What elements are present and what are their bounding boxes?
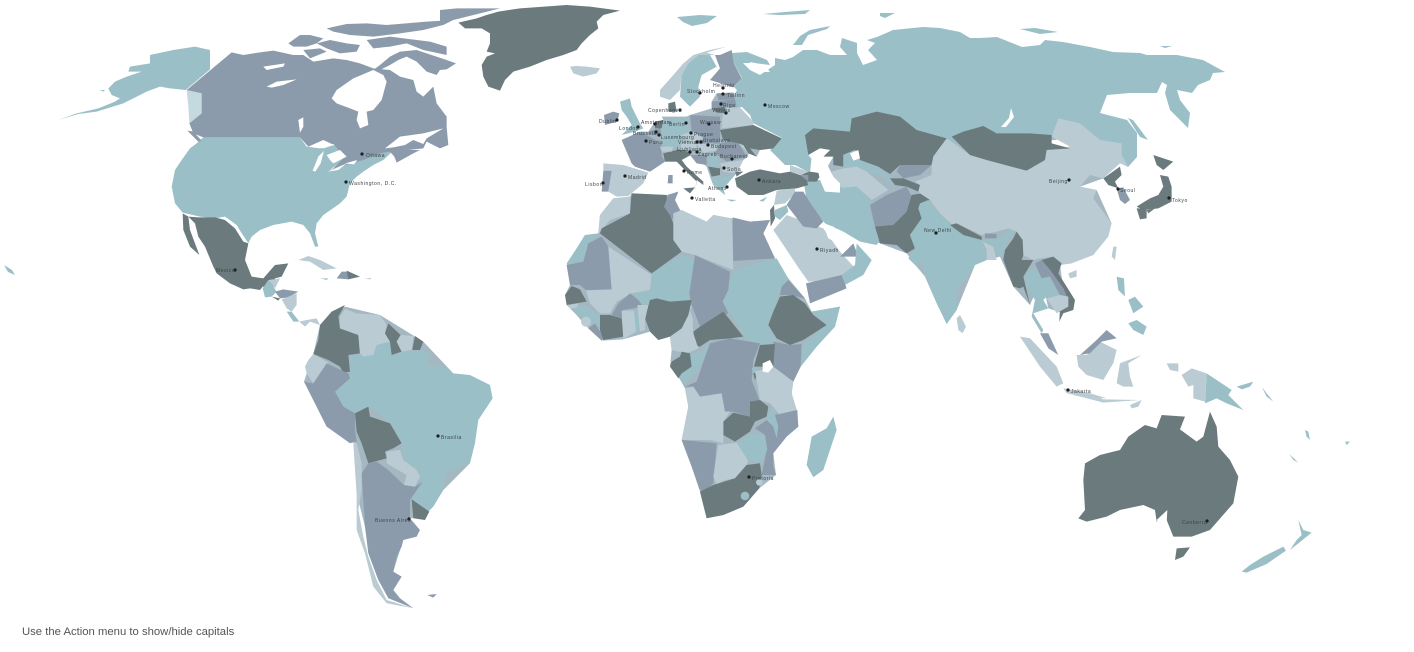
- island: New Siberian: [1160, 46, 1172, 48]
- island: Vancouver: [187, 131, 202, 142]
- island: Severnaya Zemlya: [880, 13, 895, 18]
- gulf: St Lawrence: [385, 128, 443, 148]
- island: Sakhalin: [1128, 118, 1148, 140]
- capital: Paris: [644, 139, 663, 146]
- island: Falklands: [427, 594, 437, 598]
- island: Taiwan: [1112, 247, 1117, 260]
- island: Cyprus: [759, 197, 767, 202]
- island: Kyushu: [1137, 208, 1147, 219]
- country: Norway: [660, 47, 727, 100]
- country: Mali: [586, 247, 652, 313]
- land: Europe base: [622, 93, 782, 195]
- country: Armenia: [800, 175, 808, 182]
- country: India: [908, 200, 1013, 324]
- country: Botswana: [713, 443, 748, 484]
- capital: Lisbon: Lisbon: [585, 182, 603, 188]
- country: Vietnam: [1042, 257, 1075, 322]
- country: Egypt: [733, 217, 775, 261]
- capital: Berlin: Berlin: [669, 122, 685, 128]
- capital: Tallinn: Tallinn: [727, 93, 745, 99]
- country: Guyana: [385, 323, 402, 355]
- island: Hainan: [1068, 270, 1077, 278]
- country: Suriname: [397, 335, 413, 352]
- country: Bolivia: [355, 407, 402, 463]
- country: Sweden: [680, 55, 717, 107]
- country: Mauritania: [567, 237, 612, 290]
- country: Nigeria: [645, 298, 692, 340]
- island: New Britain: [1237, 382, 1253, 389]
- country: New Zealand south: [1242, 547, 1286, 573]
- capital: Jakarta: Jakarta: [1071, 389, 1091, 395]
- country: Canada: [187, 51, 448, 172]
- country: Congo: [673, 345, 710, 383]
- region: Canada and United States: [172, 20, 456, 247]
- country: Russia: [732, 27, 1225, 173]
- country: Ecuador: [305, 354, 328, 383]
- country: Denmark: [668, 102, 677, 112]
- capital: Brussels: Brussels: [633, 131, 657, 137]
- country: Jamaica: [321, 278, 328, 280]
- country: Colombia: [313, 305, 360, 373]
- island: Fiji: [1345, 442, 1350, 445]
- region: Oceania: [1071, 363, 1350, 573]
- country: Sierra Leone: [581, 317, 591, 327]
- country: Kenya: [773, 342, 802, 382]
- country: Western Sahara: [567, 235, 600, 265]
- capital: Sofia: Sofia: [727, 167, 741, 173]
- land: Asia base: [807, 142, 1122, 324]
- region: Middle East and Turkey: [727, 165, 823, 228]
- country: Serbia: [707, 155, 720, 175]
- country: Hungary: [697, 143, 720, 153]
- island: Visayas: [1128, 297, 1143, 313]
- country: Tunisia: [664, 192, 680, 220]
- country: Algeria: [600, 193, 682, 273]
- island: Luzon: [1117, 277, 1125, 297]
- capital: Amsterdam: Amsterdam: [641, 120, 672, 126]
- island: Sicily: [683, 187, 695, 193]
- capital: Canberra: Canberra: [1182, 520, 1207, 526]
- country: United Kingdom: [620, 98, 643, 135]
- island: Melville group: [317, 40, 360, 53]
- country: Senegal: [565, 286, 587, 305]
- country: France: [622, 132, 665, 172]
- country: Uruguay: [412, 499, 429, 520]
- island: Shikoku: [1147, 208, 1155, 213]
- country: Czech Republic: [680, 132, 707, 143]
- country: Iraq: [787, 192, 823, 228]
- lake: Superior: [308, 140, 334, 148]
- country: Laos: [1035, 260, 1067, 297]
- country: Gabon: [670, 352, 692, 378]
- country: Jordan: [775, 205, 788, 220]
- country: Saudi Arabia: [773, 215, 857, 282]
- capital: Warsaw: Warsaw: [700, 120, 721, 126]
- gulf: Spencer: [1157, 510, 1167, 525]
- island: Baffin: [373, 50, 456, 75]
- island: Ellesmere: [440, 8, 500, 23]
- country: Morocco: [598, 197, 630, 233]
- footer note: Use the Action menu to show/hide capitals: [22, 626, 234, 638]
- country: Croatia and Bosnia: [690, 155, 707, 165]
- country: Madagascar: [807, 417, 837, 477]
- land: South America base: [304, 307, 490, 577]
- country: Kazakhstan: [805, 112, 947, 174]
- country: Mozambique: [755, 410, 798, 475]
- country: Portugal: [602, 171, 613, 192]
- capital: Valletta: Valletta: [695, 197, 716, 203]
- country: Cuba: [298, 256, 337, 270]
- lake: Great Slave: [267, 79, 297, 88]
- capital: Prague: Prague: [694, 132, 713, 138]
- island: Victoria: [303, 48, 327, 58]
- state: Alaska: [58, 47, 210, 120]
- country: Australia: [1078, 412, 1238, 537]
- country: Myanmar: [1003, 232, 1033, 305]
- country: Nicaragua: [282, 293, 297, 312]
- capital: Helsinki: Helsinki: [713, 83, 735, 89]
- capital: Beijing: Beijing: [1049, 179, 1068, 185]
- capital: Madrid: Madrid: [628, 175, 647, 181]
- country: Bhutan: [985, 233, 997, 238]
- country: Iceland: [570, 66, 600, 77]
- land: Africa base: [565, 192, 840, 518]
- country: Belgium: [648, 128, 662, 135]
- country: Guinea: [573, 305, 600, 327]
- lake: Aral Sea: [850, 150, 860, 161]
- island: Novaya Zemlya: [793, 26, 830, 45]
- capital: Washington, D.C.: Washington, D.C.: [349, 181, 397, 187]
- country: Switzerland: [660, 147, 673, 152]
- capital: Athens: Athens: [708, 186, 727, 192]
- country: Sri Lanka: [957, 315, 966, 333]
- country: New Zealand north: [1290, 520, 1312, 550]
- country: Austria: [680, 142, 697, 150]
- country: Benin: [637, 305, 648, 332]
- country: Cambodia: [1047, 295, 1068, 313]
- sea: Caspian: [808, 148, 840, 193]
- island: Sulawesi: [1117, 355, 1142, 387]
- country: Zambia: [723, 400, 768, 442]
- country: Spain: [603, 163, 648, 197]
- country: Rwanda: [752, 367, 758, 373]
- gulf: Persian Gulf: [823, 223, 850, 247]
- country: Uganda: [754, 344, 775, 367]
- capital: Tallinn: [721, 92, 745, 99]
- country: Angola: [682, 387, 730, 443]
- country: Iran: [803, 180, 882, 245]
- region: Greenland and Iceland: [440, 5, 620, 91]
- country: Bangladesh: [983, 242, 997, 260]
- capital: Riga: Riga: [723, 103, 735, 109]
- island: Crete: [727, 199, 737, 202]
- island: Borneo: [1077, 342, 1117, 380]
- country: Namibia: [682, 440, 717, 492]
- country: Peru: [304, 363, 357, 443]
- country: Libya: [673, 210, 733, 270]
- country: Turkmenistan: [832, 167, 888, 200]
- island: New Caledonia: [1289, 454, 1298, 463]
- capital: Ljubljana: Ljubljana: [677, 147, 702, 153]
- capital: New Delhi: New Delhi: [924, 228, 952, 234]
- lake: Victoria: [763, 360, 773, 373]
- state: Alaska panhandle: [187, 90, 202, 123]
- country: Slovakia: [697, 138, 720, 144]
- country: Tanzania: [755, 367, 797, 415]
- capital: Tokyo: [1167, 196, 1188, 204]
- lake: Baikal: [1001, 108, 1014, 127]
- region: Alaska: [58, 47, 210, 120]
- region: Africa: [565, 192, 840, 518]
- country: Bulgaria: [720, 160, 743, 173]
- country: Burkina Faso: [612, 293, 643, 318]
- country: Georgia: [790, 165, 808, 175]
- country: UAE: [840, 243, 858, 257]
- region: Asia: [773, 112, 1173, 398]
- country: Yemen: [806, 275, 847, 303]
- region: Europe: [602, 93, 782, 197]
- country: Poland: [690, 115, 720, 140]
- country: Turkey: [735, 169, 808, 195]
- island: Kodiak: [100, 90, 105, 92]
- bay: Hudson Bay: [332, 70, 387, 128]
- country: Brazil: [333, 342, 493, 512]
- country: Japan: [1137, 155, 1173, 219]
- country: Zimbabwe: [737, 433, 767, 463]
- capital: London: London: [619, 126, 639, 132]
- country: Paraguay: [387, 450, 420, 487]
- capital: Riyadh: Riyadh: [820, 248, 839, 254]
- capital: Brasilia: Brasilia: [441, 435, 462, 441]
- country: Ivory Coast: [600, 315, 623, 340]
- country: Lithuania: [712, 107, 727, 113]
- country: Afghanistan: [870, 187, 912, 227]
- region: Scandinavia: [660, 47, 742, 107]
- island: Svalbard: [677, 15, 717, 26]
- lake: Michigan: [313, 151, 324, 172]
- lake: Great Bear: [263, 63, 285, 70]
- country: South Korea: [1117, 187, 1130, 204]
- country: Venezuela: [340, 309, 390, 357]
- lake: Huron: [327, 150, 347, 163]
- capital: Bucharest: Bucharest: [720, 154, 748, 160]
- country: Ghana: [622, 311, 636, 339]
- country: French Guiana: [412, 336, 423, 350]
- capitals: [216, 83, 1209, 526]
- island: Sardinia: [668, 175, 673, 183]
- lake: Erie: [328, 163, 347, 172]
- country: Nepal: [950, 223, 982, 240]
- country: Oman: [842, 243, 872, 285]
- country: Malaysia: [1040, 333, 1058, 355]
- country: European Turkey: [735, 172, 743, 177]
- capital: Seoul: Seoul: [1120, 188, 1136, 194]
- country: Finland: [710, 50, 742, 87]
- capital: Vienna: Vienna: [678, 140, 697, 146]
- country: Guatemala: [263, 280, 277, 297]
- country: Germany: [660, 117, 690, 147]
- country: Lesotho: [741, 492, 749, 500]
- country: Greece: [710, 175, 735, 195]
- country: Pakistan: [875, 193, 932, 253]
- country: Honduras: [275, 289, 298, 298]
- country: Ethiopia: [768, 295, 827, 345]
- country: Belize: [268, 278, 280, 288]
- country: South Africa: [700, 463, 762, 518]
- capital: Ankara: Ankara: [762, 179, 781, 185]
- country: Malawi: [767, 407, 778, 438]
- country: Thailand: [1025, 268, 1058, 333]
- island: Halmahera: [1167, 363, 1178, 372]
- island: Vanuatu: [1305, 430, 1310, 440]
- island: Hokkaido: [1153, 155, 1173, 170]
- country: Eritrea: [780, 280, 805, 298]
- island: Franz Josef Land: [763, 10, 810, 15]
- country: Swaziland: [756, 479, 763, 486]
- country: Uzbekistan: [843, 150, 893, 187]
- capital: Paris: Paris: [649, 140, 663, 146]
- capital: Budapest: Budapest: [711, 144, 737, 150]
- island: Lesser Sunda: [1071, 390, 1140, 403]
- country: Central African Republic: [693, 312, 743, 347]
- peninsula: Baja California: [183, 213, 199, 255]
- country: Liberia: [588, 323, 603, 341]
- capital: Stockholm: Stockholm: [687, 89, 715, 95]
- capital: Sofia: [722, 166, 741, 173]
- country: Burundi: [753, 372, 758, 380]
- country: Costa Rica: [287, 312, 299, 322]
- capital: Pretoria: Pretoria: [752, 476, 774, 482]
- island: Honshu: [1137, 175, 1172, 210]
- country: Niger: [634, 255, 697, 305]
- country: Israel: [770, 205, 775, 227]
- country: Somalia: [800, 307, 840, 367]
- lake: Ontario: [345, 160, 357, 164]
- capital: Rome: Rome: [687, 170, 703, 176]
- capital: Zagreb: [695, 150, 717, 158]
- country: North Korea: [1103, 167, 1122, 188]
- country: Albania and Macedonia: [708, 167, 720, 177]
- island: Hawaii: [4, 265, 15, 275]
- country: Dominican Republic: [347, 271, 360, 279]
- country: Slovenia: [683, 152, 692, 155]
- island: Mindanao: [1128, 320, 1147, 335]
- country: Belarus: [722, 107, 753, 128]
- island: Sumatra: [1020, 337, 1063, 387]
- country: Ukraine: [720, 125, 782, 157]
- region: Russia and northern Eurasia: [677, 10, 1225, 173]
- country: Greenland: [458, 5, 620, 91]
- country: Estonia: [717, 93, 735, 100]
- capital: Ottawa: Ottawa: [366, 153, 385, 159]
- island: Tasmania: [1175, 547, 1190, 560]
- country: DR Congo: [685, 338, 760, 417]
- island: Solomon: [1262, 387, 1273, 402]
- country: Mongolia: [952, 126, 1070, 171]
- country: Argentina: [362, 462, 423, 608]
- country: United States: [172, 137, 392, 247]
- country: El Salvador: [272, 297, 280, 301]
- country: Panama: [299, 318, 320, 327]
- capital: Bratislava: Bratislava: [703, 138, 730, 144]
- lake: Winnipeg: [298, 117, 303, 133]
- country: Ireland: [604, 112, 619, 125]
- sea: White Sea: [750, 62, 770, 72]
- capital: Zagreb: Zagreb: [698, 152, 717, 158]
- region: West Papua: [1182, 368, 1207, 402]
- capital: Mexico: Mexico: [216, 268, 235, 274]
- country: Italy: [663, 148, 703, 192]
- country: Netherlands: [655, 120, 663, 128]
- capital: Tokyo: Tokyo: [1172, 198, 1188, 204]
- island: Sarawak: [1080, 330, 1117, 355]
- country: Papua New Guinea: [1205, 373, 1243, 410]
- country: Kyrgyzstan: [897, 165, 932, 178]
- country: Guinea-Bissau: [567, 303, 578, 308]
- island: Severnaya east: [1020, 28, 1058, 34]
- country: Chad: [689, 255, 730, 327]
- country: Chile: [353, 442, 413, 608]
- island: Timor: [1130, 400, 1142, 408]
- capital: Luxembourg: Luxembourg: [661, 135, 694, 141]
- capital: Vilnius: Vilnius: [712, 108, 730, 114]
- country: Puerto Rico: [365, 277, 372, 280]
- region: Mexico, Central and South America: [183, 213, 493, 608]
- country: Azerbaijan: [800, 172, 822, 182]
- country: Haiti: [337, 272, 348, 279]
- country: China: [915, 118, 1128, 265]
- capital: Moscow: Moscow: [768, 104, 790, 110]
- country: Mexico: [188, 217, 288, 290]
- country: Cameroon: [670, 305, 698, 353]
- country: Latvia: [712, 99, 737, 108]
- island: Queen Elizabeth: [327, 20, 453, 37]
- island: Java: [1063, 388, 1107, 398]
- capital: Buenos Aires: Buenos Aires: [375, 518, 411, 524]
- country: Syria: [774, 188, 795, 205]
- country: Togo: [635, 311, 640, 332]
- island: Banks: [288, 35, 323, 47]
- country: Romania: [715, 140, 747, 162]
- country: Moldova: [737, 140, 748, 153]
- capital: Copenhagen: Copenhagen: [648, 108, 682, 114]
- country: Tajikistan: [890, 178, 920, 192]
- capital: Dublin: Dublin: [599, 119, 616, 125]
- country: Sudan: [723, 258, 788, 345]
- island: Devon: [367, 37, 447, 55]
